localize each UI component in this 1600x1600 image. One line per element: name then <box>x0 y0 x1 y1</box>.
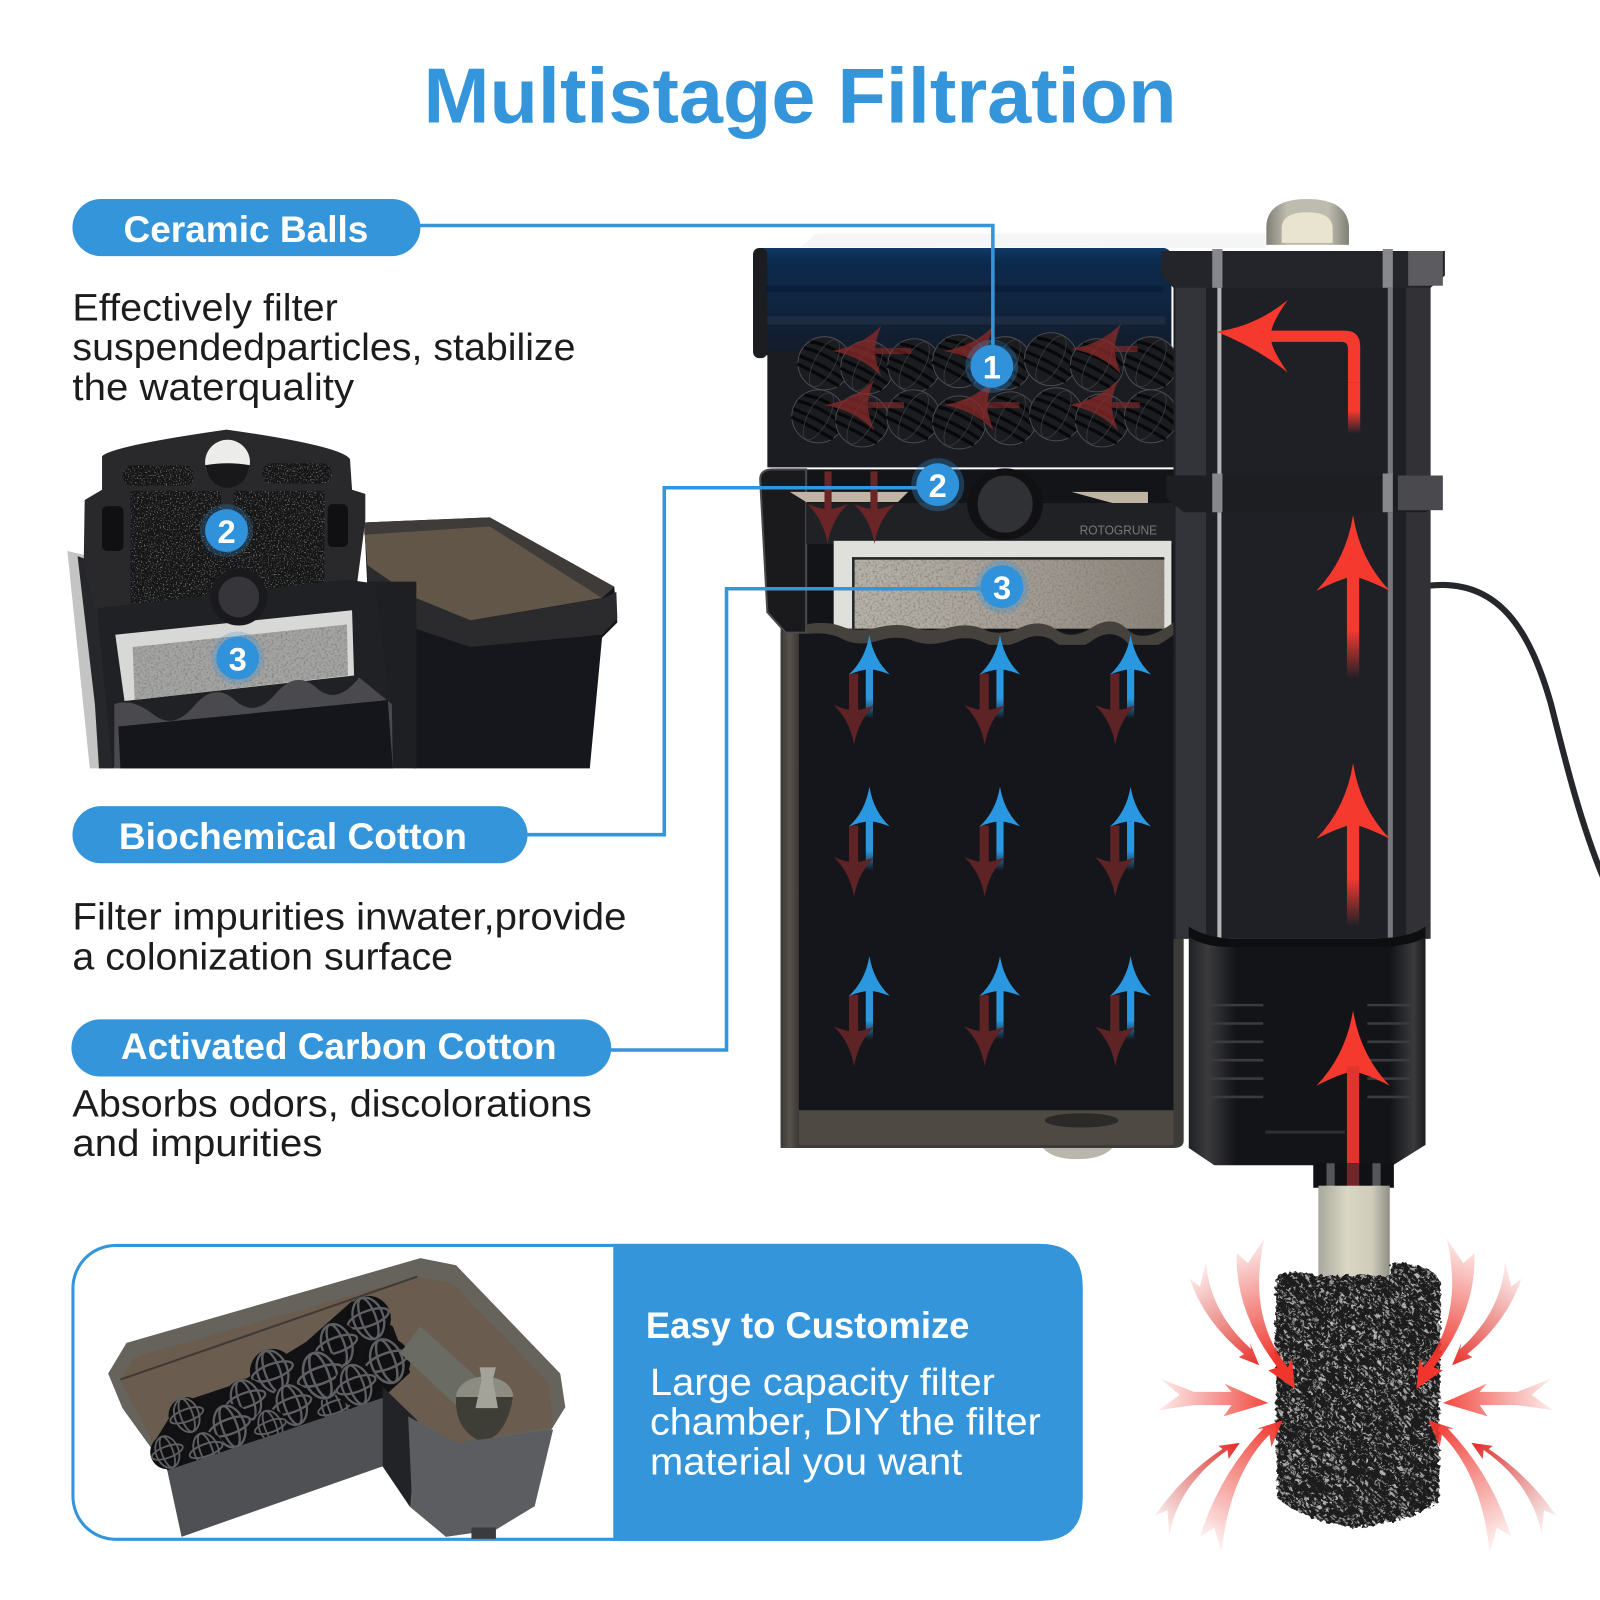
ceramic balls <box>790 331 1181 450</box>
photo: open filter tank with ceramic balls <box>108 1258 565 1539</box>
label: Biochemical Cotton <box>72 806 528 863</box>
cotton pad <box>97 568 390 767</box>
label: Activated Carbon Cotton <box>71 1019 611 1077</box>
photo: open filter cartridge <box>67 430 617 768</box>
badge: 3 <box>976 560 1029 613</box>
badge: left 3 <box>211 632 264 685</box>
arrow up 2 <box>1316 763 1390 927</box>
top knob <box>1266 199 1349 245</box>
badge: left 3: 3 <box>229 640 247 677</box>
heading: Easy to Customize <box>646 1305 969 1346</box>
ceramic chamber <box>753 248 1179 467</box>
top collar <box>1161 249 1445 288</box>
badge: 3: 3 <box>993 569 1011 606</box>
activated carbon cotton <box>834 541 1171 629</box>
filter knob <box>967 468 1043 540</box>
text: activated carbon description: Absorbs odors, discolorations <box>72 1082 592 1124</box>
elbow arrow <box>1216 300 1360 434</box>
badge: 1 <box>965 340 1018 393</box>
internal pump <box>400 1327 513 1441</box>
pump base <box>1189 927 1426 1165</box>
front wall <box>167 1398 383 1537</box>
back box <box>364 517 617 768</box>
text: biochemical cotton description: a colonization surface <box>72 935 453 977</box>
power cord <box>1429 585 1600 880</box>
front small compartment <box>408 1416 553 1537</box>
inflow arrows: left <box>1155 1239 1295 1553</box>
badge: left 2 <box>200 504 253 557</box>
top dark red arrows <box>807 471 895 544</box>
text: ceramic balls description: the waterquality <box>72 366 354 408</box>
label: Ceramic Balls <box>72 199 420 256</box>
intake sponge <box>1276 1263 1441 1528</box>
horizontal dark red arrows <box>824 323 1140 431</box>
badge: left 2: 2 <box>217 513 236 550</box>
description: material you want <box>650 1440 963 1482</box>
blue text block <box>613 1244 1083 1541</box>
text: ceramic balls description: Effectively filter <box>72 286 338 328</box>
leader lines <box>418 226 993 1050</box>
middle collar <box>1166 473 1443 512</box>
title: Multistage Filtration <box>423 53 1177 139</box>
text: ceramic balls description: suspendedparticles, stabilize <box>72 326 576 368</box>
description: Large capacity filter <box>650 1361 995 1403</box>
badge: 2 <box>911 458 964 511</box>
inflow arrows: right <box>1416 1239 1556 1553</box>
badge: 2: 2 <box>929 467 947 504</box>
label: Biochemical Cotton: Biochemical Cotton <box>119 816 467 857</box>
wavy ledge <box>114 678 393 768</box>
product: hang-on filter <box>753 199 1600 1553</box>
text: biochemical cotton description: Filter impurities inwater,provide <box>72 896 627 938</box>
label: Ceramic Balls: Ceramic Balls <box>123 209 368 250</box>
big red arrows <box>1216 300 1390 1163</box>
arrow up 3 <box>1316 1010 1390 1163</box>
panel: easy to customize <box>73 1244 1083 1541</box>
ball pile shadow <box>153 1301 410 1470</box>
brand mark: ROTOGRUNE <box>1080 523 1157 538</box>
wavy ledge <box>806 621 1173 645</box>
water tank <box>760 469 1184 1159</box>
badge: 1: 1 <box>983 349 1001 386</box>
text: activated carbon description: and impurities <box>72 1122 322 1164</box>
sponge plate <box>84 430 365 622</box>
description: chamber, DIY the filter <box>650 1401 1041 1443</box>
arrow up 1 <box>1316 515 1390 679</box>
label: Activated Carbon Cotton: Activated Carbon Cotton <box>121 1026 557 1067</box>
lid highlight <box>801 234 1265 248</box>
blue and red flow arrows <box>834 635 1151 1066</box>
pump column <box>1173 281 1431 939</box>
intake tube <box>1313 1163 1394 1283</box>
balls <box>150 1293 411 1471</box>
